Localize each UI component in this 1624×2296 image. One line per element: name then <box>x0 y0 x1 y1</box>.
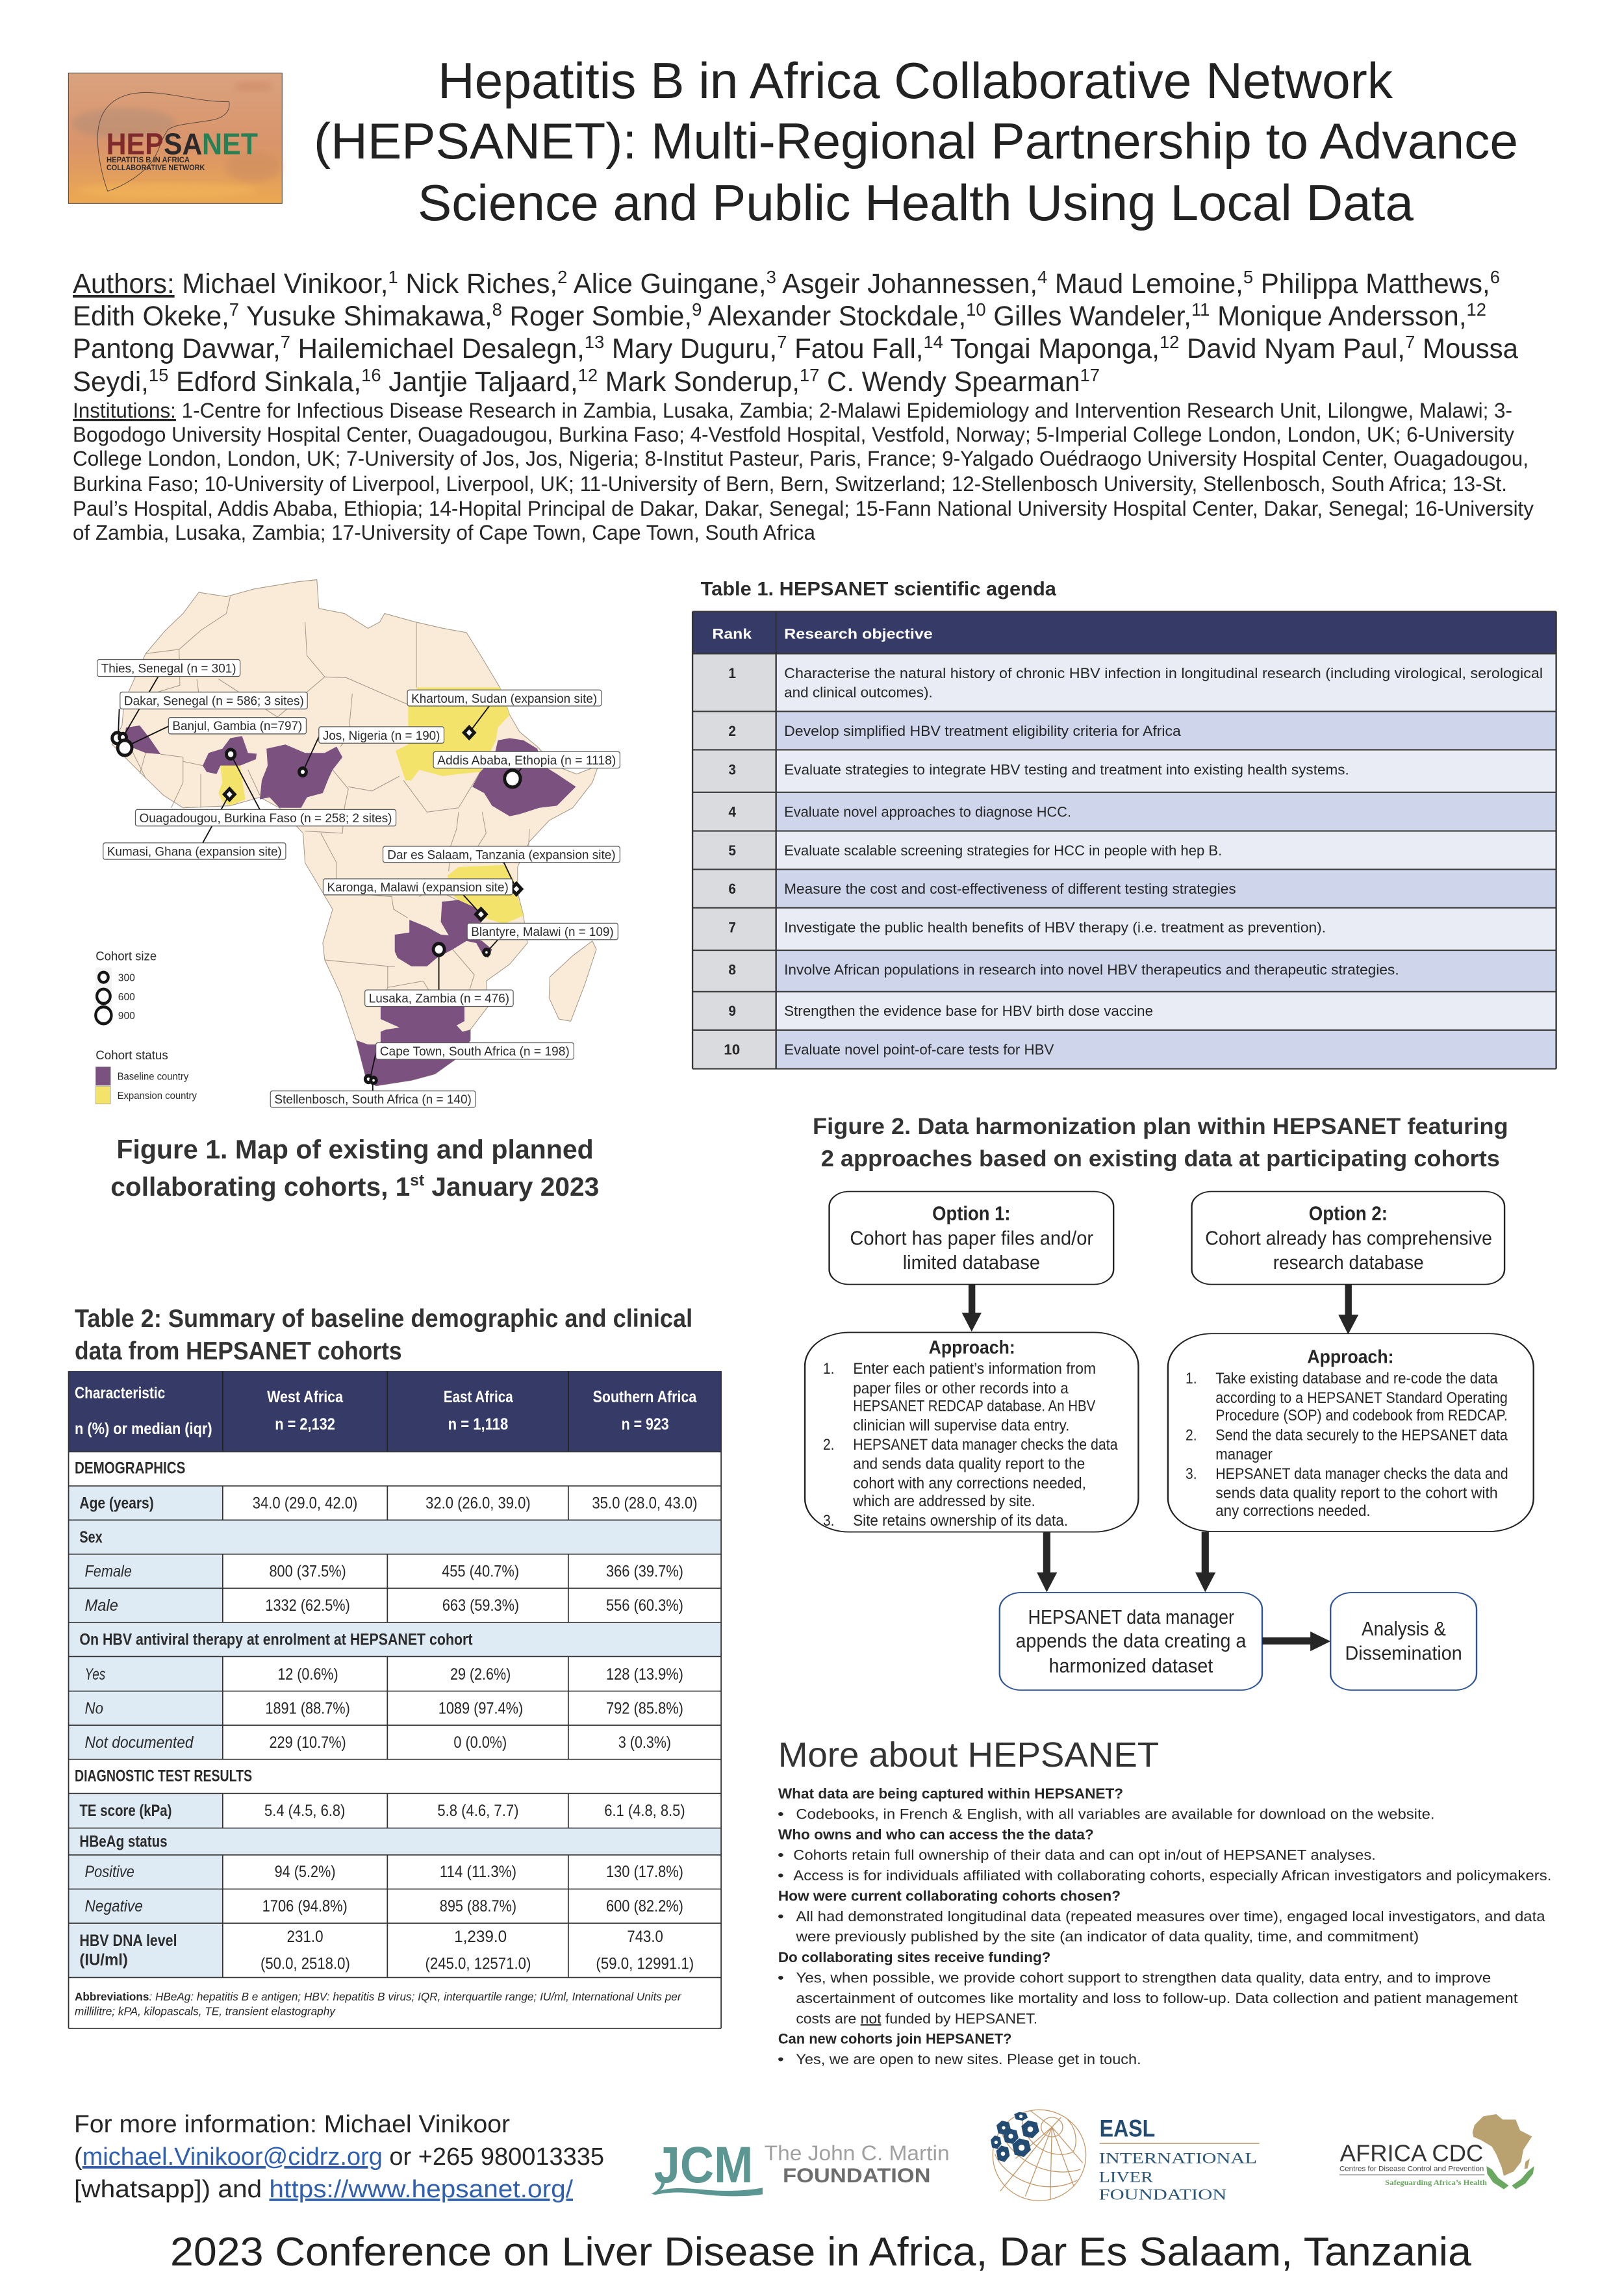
logo: EASL International Liver Foundation: LIVER <box>1099 2169 1153 2186</box>
table 2: baseline summary <box>69 1304 721 2028</box>
box: approach 2: manager <box>1215 1446 1273 1463</box>
table 1 body rows: 2 <box>728 723 736 739</box>
map legend: cohort size: Cohort size <box>95 949 157 963</box>
table 2 title <box>75 1304 692 1365</box>
box: approach 1: Approach: <box>929 1337 1015 1358</box>
box: option 2: Cohort already has comprehensive <box>1205 1227 1492 1249</box>
table 2 values: (245.0, 12571.0) <box>425 1954 531 1973</box>
table 2 values: 94 (5.2%) <box>275 1863 336 1881</box>
authors: Gilles Wandeler, <box>986 301 1191 332</box>
table 1 body rows: 1 <box>728 665 736 681</box>
figure 1 caption <box>110 1135 599 1202</box>
authors: 12 <box>1160 332 1179 352</box>
table 1 body rows: and clinical outcomes). <box>784 684 933 700</box>
box: data manager <box>1000 1593 1262 1690</box>
authors: Tongai Maponga, <box>943 333 1160 364</box>
map label: Cape Town: Cape Town, South Africa (n = 198) <box>380 1044 570 1058</box>
box: option 1 <box>830 1192 1113 1285</box>
logo wordmark: HEPATITIS B IN AFRICA <box>107 155 190 164</box>
logo: EASL International Liver Foundation: FOUNDATION <box>1099 2187 1226 2204</box>
authors: 3 <box>767 267 776 287</box>
logo: HEPSANET <box>68 73 282 203</box>
box: option 1: Option 1: <box>932 1202 1011 1225</box>
box: data manager: appends the data creating a <box>1016 1630 1247 1652</box>
Q and A list: Yes, we are open to new sites. Please get in touch. <box>796 2051 1141 2067</box>
authors: Mark Sonderup, <box>598 366 800 397</box>
table 2 values: 5.8 (4.6, 7.7) <box>437 1802 518 1820</box>
map: country borders <box>124 597 529 1007</box>
box: approach 2: 2. <box>1186 1426 1197 1444</box>
table 1 body rows: 3 <box>728 762 736 778</box>
table 2 values: 1891 (88.7%) <box>265 1700 350 1718</box>
Q and A list: • <box>778 1970 784 1986</box>
table 1 header: Research objective <box>784 625 933 642</box>
table 2 values: 600 (82.2%) <box>606 1897 683 1916</box>
table 2 values: 12 (0.6%) <box>277 1665 338 1684</box>
logo: Africa CDC: Safeguarding Africa’s Health <box>1385 2178 1487 2187</box>
table 1 body rows: Measure the cost and cost-effectiveness of different testing strategies <box>784 881 1236 897</box>
table 1 body rows: Evaluate novel approaches to diagnose HCC. <box>784 803 1071 820</box>
box: approach 2: any corrections needed. <box>1215 1502 1371 1519</box>
Q and A list: costs are not funded by HEPSANET. <box>796 2011 1037 2026</box>
map legend: cohort status: Cohort status <box>95 1048 168 1062</box>
table 2 values: 6.1 (4.8, 8.5) <box>604 1802 685 1820</box>
box: approach 1: HEPSANET data manager checks the data <box>853 1436 1118 1453</box>
map label: Dakar: Dakar, Senegal (n = 586; 3 sites) <box>124 694 304 708</box>
logo: EASL International Liver Foundation <box>991 2110 1260 2204</box>
authors: Alice Guingane, <box>567 268 767 299</box>
table 2 row labels: Positive <box>85 1863 134 1881</box>
contact information: (michael.Vinikoor@cidrz.org or +265 980013335 <box>74 2143 604 2171</box>
authors: Monique Andersson, <box>1210 301 1467 332</box>
table 2 values: 34.0 (29.0, 42.0) <box>253 1495 357 1513</box>
box: approach 1: HEPSANET REDCAP database. An HBV <box>853 1397 1096 1415</box>
authors: Roger Sombie, <box>502 301 692 332</box>
map label: Addis Ababa: Addis Ababa, Ethopia (n = 1118) <box>437 753 616 767</box>
map: Madagascar <box>549 941 596 1021</box>
table 2 values: (59.0, 12991.1) <box>596 1954 694 1973</box>
institutions: Bogodogo University Hospital Center, Ouagadougou, Burkina Faso; 4-Vestfold Hospital, Vestfold, Norway; 5-Imperial College London, London, UK; 6-University <box>73 423 1514 446</box>
title: Science and Public Health Using Local Data <box>418 174 1414 231</box>
title: (HEPSANET): Multi-Regional Partnership to Advance <box>314 112 1518 170</box>
Q and A list: Do collaborating sites receive funding? <box>778 1950 1050 1965</box>
Q and A list: • <box>778 2051 784 2067</box>
authors: 17 <box>800 365 819 385</box>
table 2 header: n = 923 <box>622 1415 669 1433</box>
map label: Thies: Thies, Senegal (n = 301) <box>101 661 236 675</box>
logo: EASL International Liver Foundation: EASL <box>1100 2114 1155 2141</box>
icon: liver outline <box>97 92 229 191</box>
table 2 values: (50.0, 2518.0) <box>260 1954 350 1973</box>
box: data manager: HEPSANET data manager <box>1028 1606 1234 1628</box>
authors: 8 <box>492 299 502 320</box>
authors: 6 <box>1490 267 1500 287</box>
table 2 row labels: On HBV antiviral therapy at enrolment at HEPSANET cohort <box>79 1631 472 1649</box>
table 1 body rows: Evaluate novel point-of-care tests for HBV <box>784 1042 1054 1058</box>
map legend: cohort size <box>95 949 157 1024</box>
table 1 body rows: Evaluate scalable screening strategies for HCC in people with hep B. <box>784 842 1222 859</box>
table 2 row labels: Yes <box>85 1665 105 1684</box>
table 1 body rows: 7 <box>728 919 736 935</box>
table 1 body rows: 8 <box>728 962 736 978</box>
box: option 2: research database <box>1273 1251 1424 1274</box>
authors: Mary Duguru, <box>604 333 777 364</box>
Q and A list <box>778 1786 1551 2067</box>
box: approach 1: 1. <box>823 1360 835 1377</box>
box: option 1: Cohort has paper files and/or <box>850 1227 1093 1249</box>
map label: Kumasi: Kumasi, Ghana (expansion site) <box>107 844 282 858</box>
map land <box>112 580 598 1086</box>
table 2 values: 229 (10.7%) <box>269 1734 346 1752</box>
authors: Hailemichael Desalegn, <box>290 333 585 364</box>
table 2 values: 5.4 (4.5, 6.8) <box>264 1802 345 1820</box>
contact information <box>74 2111 604 2203</box>
table 1 body rows: 10 <box>724 1042 740 1058</box>
table 1 body rows <box>692 612 1556 1069</box>
authors: Pantong Davwar, <box>73 333 285 364</box>
authors: Seydi, <box>73 366 151 397</box>
more about HEPSANET section: More about HEPSANET <box>778 1735 1159 1774</box>
authors: Fatou Fall, <box>787 333 923 364</box>
box: analysis and dissemination: Dissemination <box>1345 1642 1462 1664</box>
table 2 row labels: TE score (kPa) <box>79 1802 171 1820</box>
title <box>314 52 1518 231</box>
box: approach 1: Enter each patient’s information from <box>853 1360 1096 1377</box>
box: approach 2: sends data quality report to the cohort with <box>1215 1484 1498 1502</box>
institutions: of Zambia, Lusaka, Zambia; 17-University of Cape Town, Cape Town, South Africa <box>73 521 815 544</box>
table 1 body rows: Develop simplified HBV treatment eligibility criteria for Africa <box>784 723 1182 739</box>
box: approach 1: paper files or other records into a <box>853 1380 1069 1396</box>
title: Hepatitis B in Africa Collaborative Network <box>438 52 1393 109</box>
institutions <box>73 399 1534 544</box>
contact information: [whatsapp]) and https://www.hepsanet.org/ <box>74 2176 573 2203</box>
logo wordmark: COLLABORATIVE NETWORK <box>107 163 205 172</box>
authors: 10 <box>966 299 986 320</box>
authors: 7 <box>229 299 239 320</box>
table 2 values: 231.0 <box>287 1928 324 1946</box>
authors: 12 <box>578 365 598 385</box>
map legend: cohort status: Expansion country <box>118 1091 197 1102</box>
Q and A list: What data are being captured within HEPSANET? <box>778 1786 1123 1802</box>
map label: Jos: Jos, Nigeria (n = 190) <box>323 728 440 742</box>
figure 1 caption: st <box>410 1172 424 1190</box>
logo: Africa CDC: AFRICA CDC <box>1340 2139 1483 2166</box>
logo: JCM Foundation: The John C. Martin <box>765 2141 950 2165</box>
table 2 values: 35.0 (28.0, 43.0) <box>592 1495 698 1513</box>
logo: JCM Foundation: FOUNDATION <box>783 2164 931 2187</box>
box: approach 1: clinician will supervise data entry. <box>853 1417 1069 1433</box>
table 2 header: West Africa <box>267 1388 344 1406</box>
table 2 values: 128 (13.9%) <box>606 1665 683 1684</box>
authors: 13 <box>585 332 604 352</box>
institutions: Burkina Faso; 10-University of Liverpool, Liverpool, UK; 11-University of Bern, Bern, Switzerland; 12-Stellenbosch University, Stellenbosch, South Africa; 13-St. <box>73 472 1507 496</box>
table 2 header: n (%) or median (iqr) <box>75 1420 212 1438</box>
table 2 values: 32.0 (26.0, 39.0) <box>425 1495 531 1513</box>
figure 1 caption: collaborating cohorts, 1 <box>110 1172 392 1202</box>
more about HEPSANET section <box>778 1735 1551 2067</box>
box: option 2 <box>1192 1192 1504 1285</box>
box: option 2: Option 2: <box>1309 1202 1388 1225</box>
table 1 body rows: 5 <box>728 842 736 859</box>
table 2 row labels: DIAGNOSTIC TEST RESULTS <box>75 1767 252 1785</box>
box: approach 2: 3. <box>1186 1465 1197 1482</box>
table 2 row labels <box>75 1459 472 1969</box>
table 2 header: Southern Africa <box>593 1388 697 1406</box>
box: approach 1 <box>805 1332 1138 1532</box>
box: approach 1: 3. <box>823 1512 835 1529</box>
table 2 row labels: Male <box>85 1596 118 1615</box>
authors: C. Wendy Spearman <box>819 366 1080 397</box>
authors: Edith Okeke, <box>73 301 233 332</box>
table 2 header: n = 2,132 <box>275 1415 335 1433</box>
authors: 1 <box>388 267 398 287</box>
authors: Edford Sinkala, <box>168 366 361 397</box>
logo: JCM Foundation <box>652 2136 950 2196</box>
map label: Blantyre: Blantyre, Malawi (n = 109) <box>471 924 614 939</box>
table 2 values: 1089 (97.4%) <box>438 1700 523 1718</box>
arrow: option 1 to approach <box>962 1285 982 1331</box>
table 1 header: Rank <box>712 625 752 642</box>
authors: 4 <box>1037 267 1047 287</box>
table 2 grid and shading <box>69 1371 721 2028</box>
box: approach 1: cohort with any corrections needed, <box>853 1474 1086 1491</box>
table 2 values <box>253 1495 698 1973</box>
table 2 values: 0 (0.0%) <box>453 1734 507 1752</box>
box: approach 1: 2. <box>823 1436 835 1453</box>
map label: Banjul: Banjul, Gambia (n=797) <box>172 719 302 733</box>
table 2 values: 114 (11.3%) <box>440 1863 516 1881</box>
hexagons <box>991 2112 1039 2162</box>
map legend: cohort size: 300 <box>118 972 135 984</box>
table 1 header <box>692 612 1556 653</box>
table 2 header <box>69 1371 721 1452</box>
table 2 values: 1,239.0 <box>454 1928 507 1946</box>
logo wordmark <box>107 127 258 172</box>
figure 2: data harmonization flowchart <box>805 1113 1534 1690</box>
conference footer: 2023 Conference on Liver Disease in Africa, Dar Es Salaam, Tanzania <box>170 2230 1472 2275</box>
table 1 body rows: 9 <box>728 1003 736 1019</box>
box: approach 2: Take existing database and re-code the data <box>1215 1370 1498 1387</box>
table 2 title: data from HEPSANET cohorts <box>75 1337 402 1365</box>
table 2 row labels: No <box>85 1700 103 1718</box>
authors: 5 <box>1243 267 1253 287</box>
authors: Authors: Michael Vinikoor, <box>73 268 393 299</box>
table 2 row labels: HBeAg status <box>79 1832 168 1851</box>
table 2 abbreviations: Abbreviations : HBeAg: hepatitis B e antigen; HBV: hepatitis B virus; IQR, interquartile range; IU/ml, International Units per <box>75 1990 682 2003</box>
authors: Nick Riches, <box>398 268 557 299</box>
authors: 17 <box>1080 365 1100 385</box>
arrow: option 2 to approach <box>1338 1285 1358 1334</box>
table 1 title: Table 1. HEPSANET scientific agenda <box>701 578 1057 599</box>
table 1 body rows: Strengthen the evidence base for HBV birth dose vaccine <box>784 1003 1153 1019</box>
logo wordmark: NET <box>202 127 258 160</box>
box: approach 2: 1. <box>1186 1370 1197 1387</box>
globe <box>993 2110 1086 2201</box>
figure 1: map of Africa cohorts <box>95 580 620 1107</box>
table 2 values: 895 (88.7%) <box>440 1897 516 1916</box>
map label: Stellenbosch: Stellenbosch, South Africa (n = 140) <box>274 1092 472 1106</box>
table 1 body rows: 4 <box>728 803 736 820</box>
table 2 row labels: HBV DNA level <box>79 1932 177 1950</box>
map legend: cohort status <box>95 1048 197 1104</box>
logo: Africa CDC <box>1339 2114 1534 2189</box>
table 2 row labels: (IU/ml) <box>79 1950 128 1969</box>
box: approach 2 <box>1168 1333 1534 1532</box>
table 2 values: 130 (17.8%) <box>606 1863 683 1881</box>
Q and A list: Can new cohorts join HEPSANET? <box>778 2031 1011 2047</box>
box: data manager: harmonized dataset <box>1049 1655 1213 1677</box>
table 2 abbreviations: millilitre; kPA, kilopascals, TE, transient elastography <box>75 2005 336 2017</box>
authors: 15 <box>149 365 168 385</box>
table 2 row labels: Not documented <box>85 1734 194 1752</box>
authors: Asgeir Johannessen, <box>776 268 1037 299</box>
authors <box>73 267 1518 397</box>
table 2 row labels: DEMOGRAPHICS <box>75 1459 185 1478</box>
table 2 abbreviations <box>75 1990 682 2017</box>
authors: 7 <box>1405 332 1415 352</box>
Q and A list: • <box>778 1847 784 1863</box>
table 2 values: 1332 (62.5%) <box>265 1596 350 1615</box>
table 2 row labels: Negative <box>85 1897 143 1916</box>
table 2 values: 455 (40.7%) <box>442 1563 519 1581</box>
table 2 row labels: Sex <box>79 1528 103 1546</box>
authors: Yusuke Shimakawa, <box>239 301 492 332</box>
map: baseline countries <box>124 725 576 1086</box>
map label: Ouagadougou: Ouagadougou, Burkina Faso (n = 258; 2 sites) <box>140 811 392 825</box>
Q and A list: • <box>778 1806 784 1822</box>
box: approach 1: Site retains ownership of its data. <box>853 1512 1068 1529</box>
map: expansion countries <box>218 687 524 924</box>
table 2 values: 3 (0.3%) <box>618 1734 671 1752</box>
institutions: College London, London, UK; 7-University of Jos, Jos, Nigeria; 8-Institut Pasteur, Paris, France; 9-Yalgado Ouédraogo University Hospital Center, Ouagadougou, <box>73 447 1529 470</box>
arrow: approach 1 to data manager <box>1037 1532 1057 1592</box>
map legend: cohort size: 900 <box>118 1011 135 1022</box>
box: approach 1: which are addressed by site. <box>852 1493 1035 1509</box>
logo: JCM Foundation: JCM <box>654 2136 753 2193</box>
authors: 16 <box>361 365 381 385</box>
table 2 values: 1706 (94.8%) <box>262 1897 348 1916</box>
map legend: cohort status: Baseline country <box>118 1071 189 1083</box>
table 2 values: 800 (37.5%) <box>269 1563 346 1581</box>
authors: Moussa <box>1415 333 1518 364</box>
logo: Africa CDC: Centres for Disease Control and Prevention <box>1339 2165 1484 2173</box>
authors: 2 <box>557 267 567 287</box>
table 2 title: Table 2: Summary of baseline demographic and clinical <box>75 1304 692 1332</box>
icon: hands <box>1486 2166 1534 2189</box>
map label: Karonga: Karonga, Malawi (expansion site) <box>327 880 509 894</box>
authors: Alexander Stockdale, <box>702 301 966 332</box>
authors: 7 <box>281 332 290 352</box>
authors: 11 <box>1191 299 1210 320</box>
authors: 7 <box>777 332 787 352</box>
table 2 values: 29 (2.6%) <box>450 1665 511 1684</box>
contact information: For more information: Michael Vinikoor <box>74 2111 510 2138</box>
Q and A list: • <box>778 1908 784 1924</box>
table 2 values: 663 (59.3%) <box>442 1596 519 1615</box>
institutions: Institutions: 1-Centre for Infectious Disease Research in Zambia, Lusaka, Zambia; 2-Malawi Epidemiology and Intervention Research Unit, Lilongwe, Malawi; 3- <box>73 399 1512 422</box>
box: analysis and dissemination <box>1330 1593 1477 1690</box>
table 2 values: 743.0 <box>627 1928 663 1946</box>
table 2 values: 556 (60.3%) <box>606 1596 683 1615</box>
table 2 values: 792 (85.8%) <box>606 1700 683 1718</box>
logo wordmark: SA <box>164 127 202 160</box>
authors: Maud Lemoine, <box>1047 268 1243 299</box>
arrow: approach 2 to data manager <box>1195 1532 1215 1592</box>
authors: Philippa Matthews, <box>1253 268 1490 299</box>
logo wordmark: HEP <box>107 127 164 160</box>
table 1 body rows: 6 <box>728 881 736 897</box>
Q and A list: • <box>778 1868 784 1884</box>
table 2 row labels: Female <box>85 1563 132 1581</box>
table 2 header: Characteristic <box>75 1384 165 1402</box>
box: option 1: limited database <box>903 1251 1040 1274</box>
arrow: data manager to analysis <box>1262 1632 1330 1651</box>
map label: Lusaka: Lusaka, Zambia (n = 476) <box>369 991 509 1005</box>
map: leader lines <box>118 676 522 1091</box>
authors: Jantjie Taljaard, <box>381 366 578 397</box>
table 2 header: East Africa <box>444 1388 513 1406</box>
box: approach 1: and sends data quality report to the <box>853 1455 1085 1472</box>
map label: Dar es Salaam: Dar es Salaam, Tanzania (expansion site) <box>387 848 616 862</box>
map label: Khartoum: Khartoum, Sudan (expansion site) <box>411 691 597 705</box>
table 2 values: 366 (39.7%) <box>606 1563 683 1581</box>
box: analysis and dissemination: Analysis & <box>1362 1618 1446 1640</box>
authors: 14 <box>923 332 943 352</box>
authors: 9 <box>692 299 702 320</box>
icon: Africa silhouette <box>1473 2114 1532 2176</box>
logo: EASL International Liver Foundation: INTERNATIONAL <box>1099 2151 1257 2167</box>
table 1: scientific agenda <box>692 578 1556 1069</box>
figure 2 title <box>813 1113 1508 1171</box>
authors: David Nyam Paul, <box>1179 333 1405 364</box>
map legend: cohort size: 600 <box>118 991 135 1003</box>
table 2 header: n = 1,118 <box>448 1415 508 1433</box>
institutions: Paul’s Hospital, Addis Ababa, Ethiopia; 14-Hopital Principal de Dakar, Dakar, Senegal; 15-Fann National University Hospital Center, Dakar, Senegal; 16-University <box>73 497 1534 520</box>
Q and A list: Who owns and who can access the the data? <box>778 1827 1094 1843</box>
map: cohort markers <box>112 727 522 1083</box>
Q and A list: How were current collaborating cohorts chosen? <box>778 1888 1121 1904</box>
authors: 12 <box>1467 299 1486 320</box>
table 2 row labels: Age (years) <box>79 1495 154 1513</box>
figure 1 caption: Figure 1. Map of existing and planned <box>116 1135 594 1165</box>
box: approach 2: Approach: <box>1307 1346 1393 1368</box>
figure 1 caption: January 2023 <box>424 1172 599 1202</box>
